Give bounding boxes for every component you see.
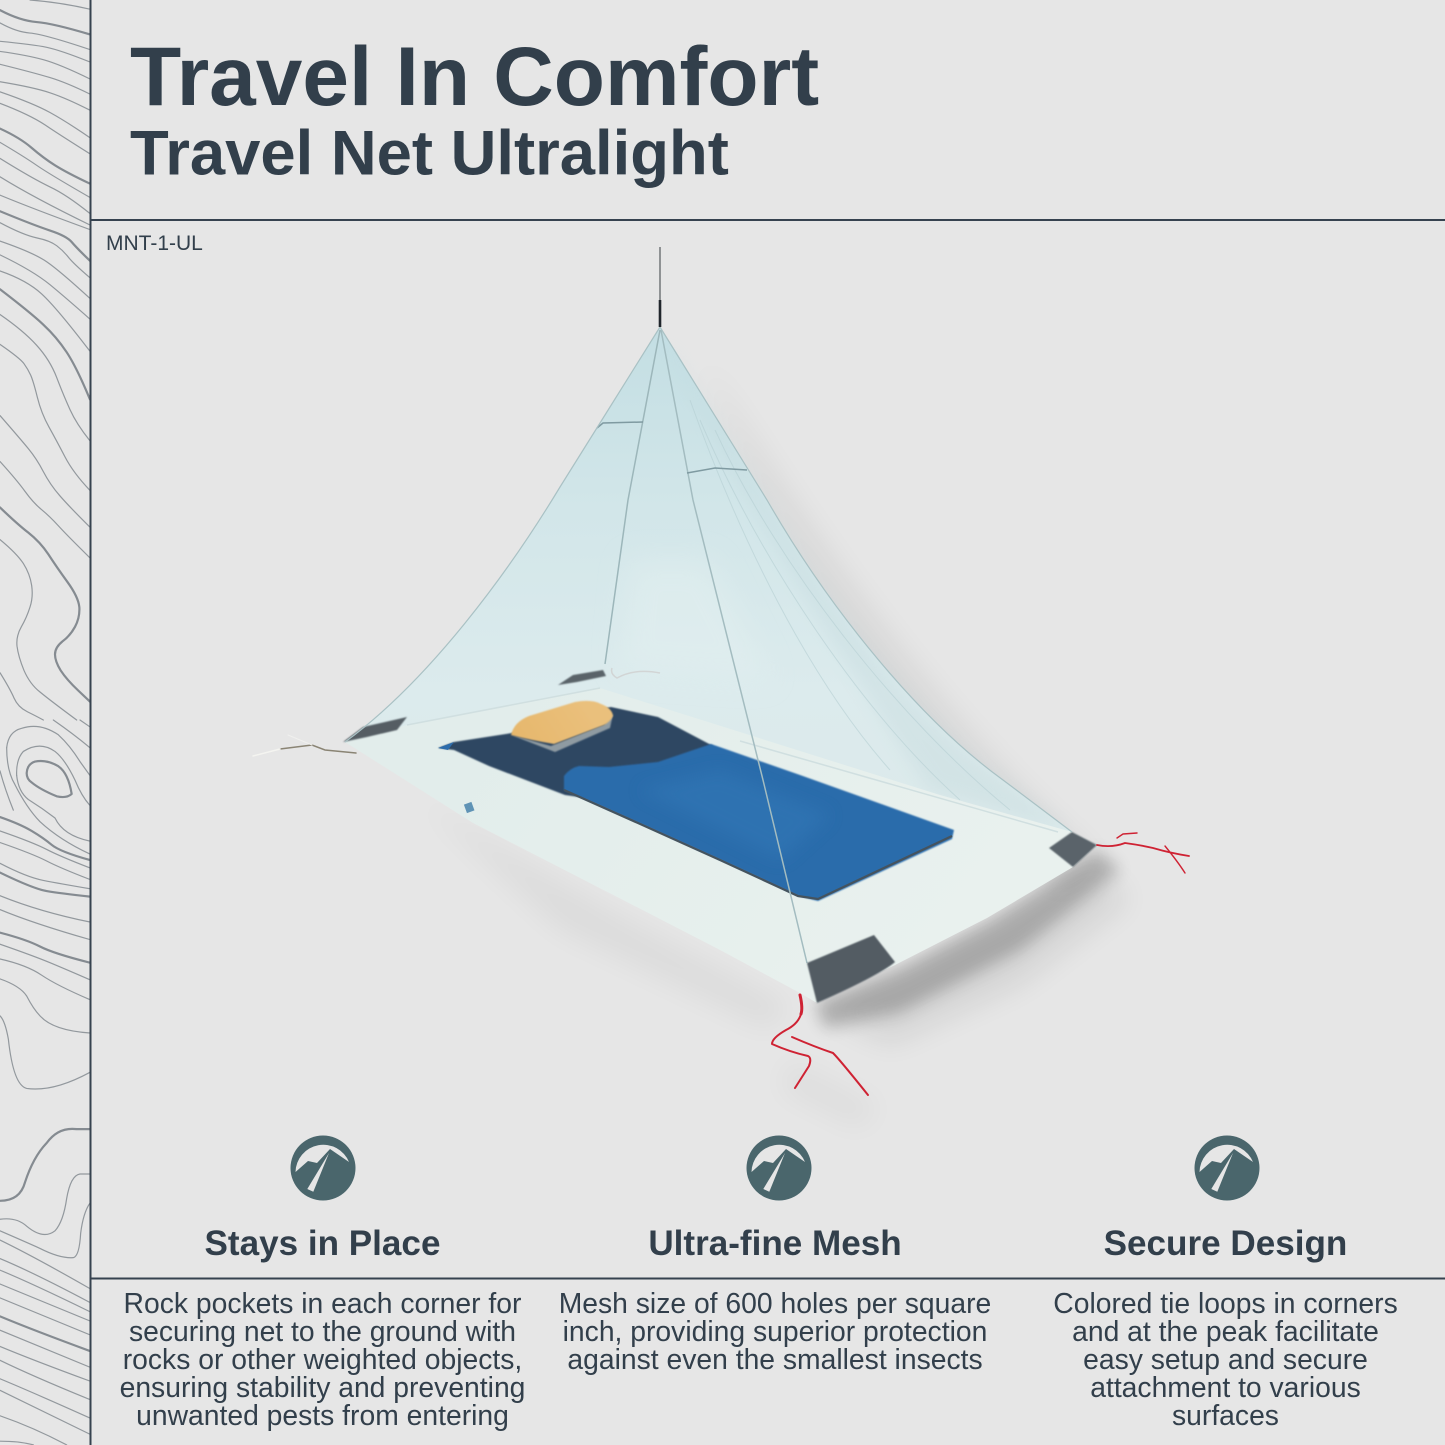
left corner tie [253,735,356,756]
description: Colored tie loops in corners [1053,1287,1398,1319]
left corner pocket [343,717,407,742]
description: securing net to the ground with [129,1315,516,1347]
pillow underside [511,714,613,752]
back corner tie [612,668,660,678]
dark sleeping bag [438,707,713,800]
blue bag zipper edge [564,790,952,899]
icon: mountain badge [746,1136,812,1200]
front corner pocket [807,935,895,1003]
topographic contour strip [0,0,90,1445]
floor hem label [464,802,474,813]
frame line: lower horizontal [91,1278,1445,1280]
feature: secure design [1053,1136,1398,1431]
description: rocks or other weighted objects, [123,1343,522,1375]
net right edge [660,327,1072,832]
red tie: front corner [772,995,868,1095]
floor back edge [407,688,1058,832]
model code: MNT-1-UL [106,232,203,255]
frame line: top horizontal [91,219,1445,221]
red tie: right corner [1097,833,1189,873]
product photo: mosquito net [253,247,1189,1130]
blue bag lighter center [640,770,830,860]
subtitle: Travel Net Ultralight [130,118,729,188]
pillow [511,701,613,744]
description: attachment to various [1090,1371,1361,1403]
blue sleeping bag [564,744,954,901]
floor [345,688,1097,1003]
icon: mountain badge [290,1136,356,1200]
description: easy setup and secure [1083,1343,1368,1375]
cast shadows [420,358,1130,1130]
peak cord [659,247,661,300]
icon: mountain badge [1194,1136,1260,1200]
feature: stays in place [120,1136,525,1431]
peak loop [659,300,661,327]
description: unwanted pests from entering [136,1399,509,1431]
description: and at the peak facilitate [1072,1315,1379,1347]
feature: ultra-fine mesh [559,1136,991,1375]
mesh walls [345,327,1072,990]
back corner pocket [558,670,606,685]
dark bag blue tip [438,742,454,750]
right wall shading [664,335,1068,830]
heading: Secure Design [1104,1224,1347,1263]
description: surfaces [1172,1399,1279,1431]
right wall mesh folds [690,400,1010,810]
description: Mesh size of 600 holes per square [559,1287,991,1319]
heading: Ultra-fine Mesh [648,1224,902,1263]
description: inch, providing superior protection [563,1315,987,1347]
description: ensuring stability and preventing [120,1371,525,1403]
description: against even the smallest insects [567,1343,983,1375]
title: Travel In Comfort [130,29,819,123]
description: Rock pockets in each corner for [124,1287,521,1319]
right corner pocket [1049,832,1097,867]
upper light patch [620,560,770,680]
seams and stitching [597,330,807,963]
frame line: vertical [90,0,92,1445]
net left edge [345,327,660,742]
heading: Stays in Place [205,1224,440,1263]
